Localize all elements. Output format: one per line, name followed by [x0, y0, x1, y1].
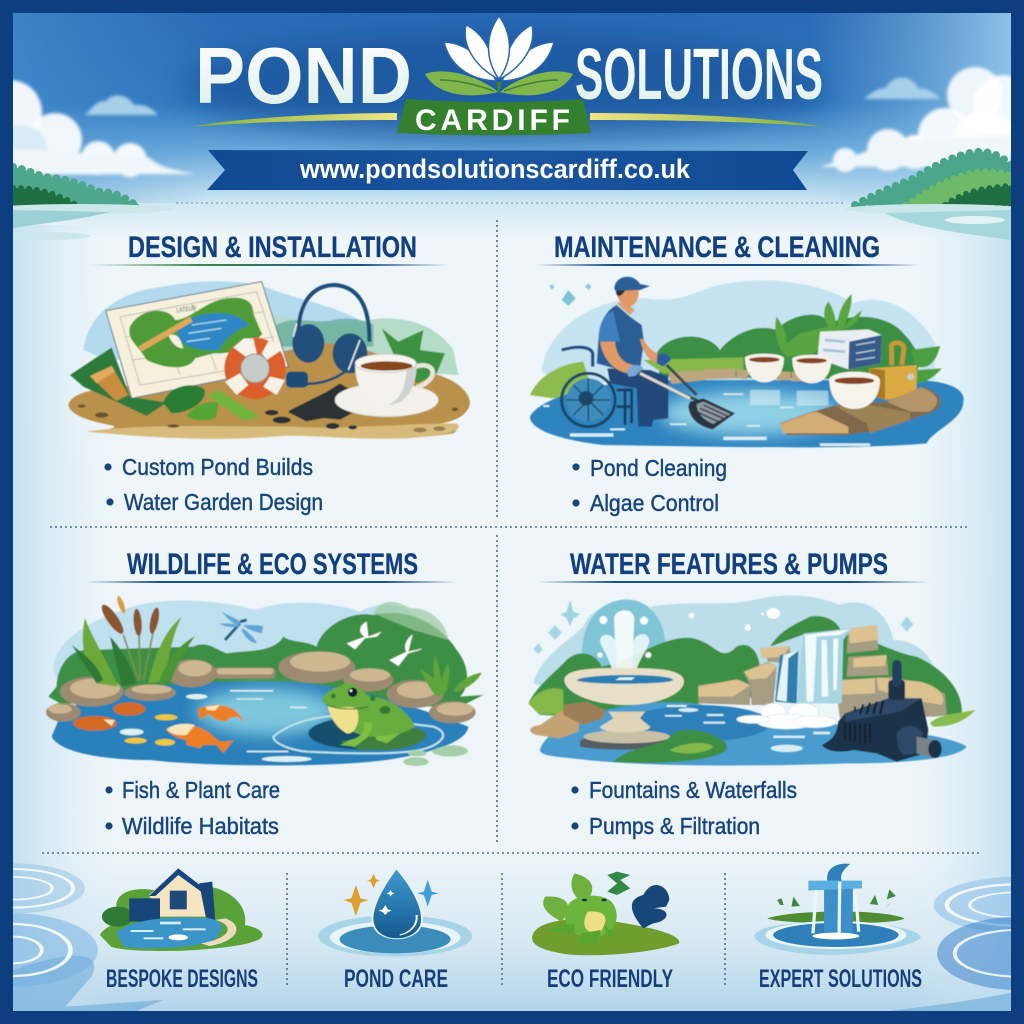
panel: wildlife and eco systems	[46, 548, 483, 839]
bullet list	[104, 454, 323, 515]
bullet list: Pumps & Filtration	[589, 813, 760, 839]
section dividers	[42, 220, 982, 853]
illustration: wildlife pond with frog and fish	[46, 595, 483, 766]
label: POND CARE	[344, 965, 448, 993]
banner text: CARDIFF	[415, 104, 570, 137]
bullet list: Water Garden Design	[124, 489, 323, 515]
icon: lotus flower	[425, 16, 573, 95]
illustration: worker cleaning pond	[530, 277, 964, 447]
banner: Cardiff	[397, 99, 591, 135]
bullet list: Algae Control	[590, 490, 719, 516]
panel: maintenance and cleaning	[530, 231, 964, 516]
logo word: POND: POND	[195, 31, 412, 120]
illustration: fountain, waterfall and pump	[528, 595, 975, 766]
footer: benefits row	[100, 864, 922, 993]
website address: www.pondsolutionscardiff.co.uk	[299, 154, 691, 184]
heading: WILDLIFE & ECO SYSTEMS	[127, 548, 418, 581]
bullet list: Pond Cleaning	[590, 455, 727, 481]
yellow swoosh right	[590, 113, 825, 127]
label: EXPERT SOLUTIONS	[759, 965, 922, 993]
bullet list: Custom Pond Builds	[122, 454, 313, 480]
heading: MAINTENANCE & CLEANING	[554, 231, 880, 264]
panel: design and installation	[68, 231, 470, 515]
bullet list: Fountains & Waterfalls	[589, 777, 797, 803]
label: BESPOKE DESIGNS	[106, 965, 258, 993]
ribbon: website	[207, 150, 808, 190]
heading: DESIGN & INSTALLATION	[128, 231, 417, 264]
bullet list	[105, 777, 280, 839]
logo word: SOLUTIONS: SOLUTIONS	[575, 35, 823, 115]
bullet list: Fish & Plant Care	[122, 777, 280, 803]
label: ECO FRIENDLY	[547, 965, 673, 993]
icon: pond care water drop	[318, 868, 472, 957]
illustration: pond plan, life ring, headphones and cup	[68, 281, 470, 439]
header: logo and website	[185, 16, 825, 190]
illustration: pond plan, life ring, headphones and cup: LATEUR	[176, 305, 197, 315]
bullet list: Wildlife Habitats	[122, 813, 279, 839]
icon: bespoke designs house	[100, 868, 263, 951]
bullet list	[572, 455, 727, 516]
icon: expert solutions fountain	[754, 864, 921, 955]
icon: eco friendly frog	[532, 872, 679, 955]
yellow swoosh left	[190, 113, 397, 127]
panel: water features and pumps	[528, 548, 975, 839]
heading: WATER FEATURES & PUMPS	[570, 548, 888, 581]
bullet list	[571, 777, 797, 839]
